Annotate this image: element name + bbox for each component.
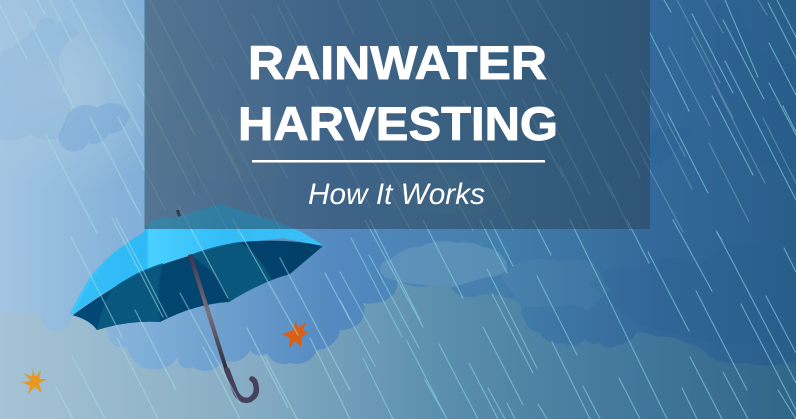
- rain: streaks behind title panel: [175, 0, 650, 230]
- rain: wide pale streaks on left: [0, 0, 350, 419]
- umbrella underside: [72, 241, 323, 330]
- clouds: upper sky: [0, 0, 796, 216]
- heading: Rainwater Harvesting: [238, 36, 558, 150]
- rain: dim streaks on right: [640, 0, 796, 240]
- icon: orange maple leaf: [282, 321, 308, 349]
- umbrella shaft: [176, 210, 229, 372]
- umbrella shaft lower: [188, 254, 229, 372]
- umbrella canopy fold: [73, 230, 147, 315]
- title panel: [144, 0, 650, 229]
- heading: Rainwater Harvesting: RAINWATER: [248, 36, 547, 89]
- umbrella canopy top: [69, 204, 325, 316]
- icon: yellow maple leaf: [22, 368, 48, 394]
- umbrella handle: [227, 370, 256, 400]
- title divider: [252, 160, 545, 162]
- rain: thin bright streaks: [340, 0, 796, 419]
- ground layer with cloud edge: [0, 280, 796, 419]
- clouds: lighter band above the ground layer: [380, 241, 796, 345]
- subtitle: How It Works: [308, 178, 485, 211]
- umbrella underside panels: [97, 242, 272, 330]
- heading: Rainwater Harvesting: HARVESTING: [238, 97, 558, 150]
- umbrella: [69, 204, 325, 400]
